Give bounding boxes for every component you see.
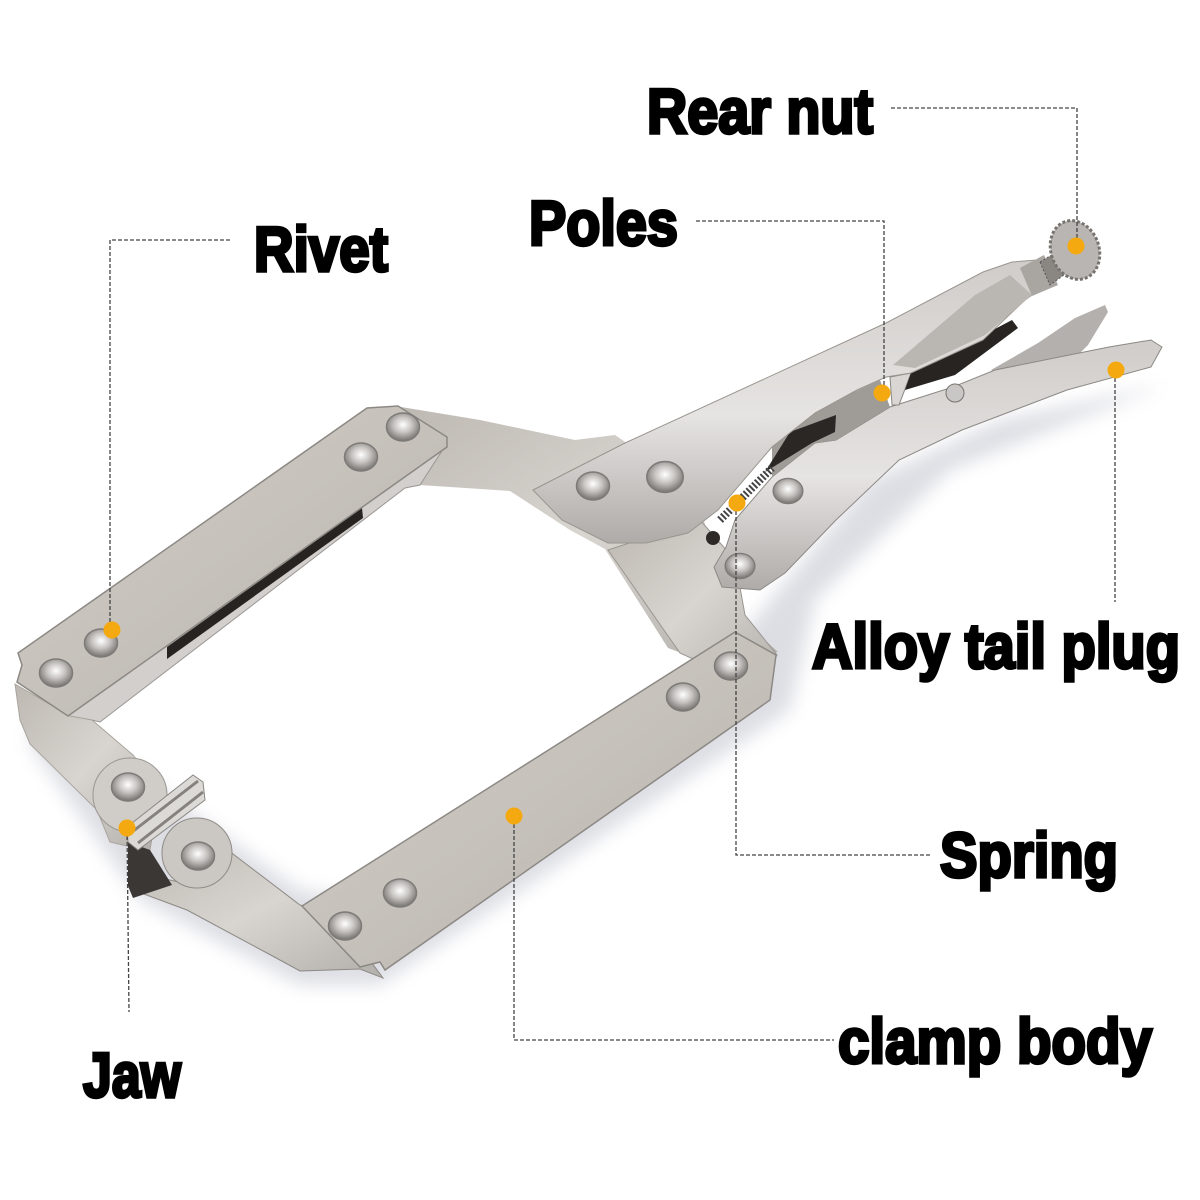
label: clamp body: clamp body bbox=[838, 1007, 1152, 1077]
black slot bbox=[167, 508, 363, 659]
rear nut bbox=[1020, 214, 1108, 296]
lower arm bbox=[130, 845, 383, 978]
dark gap and spring bbox=[706, 320, 1018, 545]
handle rivet bbox=[773, 478, 803, 504]
inner channel strip bbox=[68, 443, 447, 722]
leader: alloy tail plug bbox=[1114, 372, 1116, 602]
lower handle bbox=[714, 305, 1162, 590]
small stud bbox=[946, 384, 964, 402]
leader: rivet bbox=[110, 240, 230, 628]
upper handle with rivets bbox=[533, 260, 1047, 543]
pole stick bbox=[890, 373, 911, 405]
rivets: handle bbox=[576, 462, 683, 500]
panel: upper clamp plate bbox=[17, 406, 447, 716]
pivot rivet bbox=[725, 553, 755, 579]
leader: jaw bbox=[127, 830, 129, 1012]
rivets: upper plate bbox=[40, 413, 420, 687]
rivets: jaw bbox=[112, 773, 214, 870]
label: jaw: Jaw bbox=[83, 1041, 182, 1111]
label: rivet: Rivet bbox=[254, 215, 388, 285]
rivets: lower plate bbox=[328, 652, 748, 940]
jaw hinge bbox=[93, 758, 232, 898]
leader: poles bbox=[696, 221, 884, 392]
clamp body: rear frame and top link bbox=[68, 406, 778, 722]
label: spring: Spring bbox=[940, 821, 1118, 891]
leader: rear nut bbox=[891, 108, 1077, 240]
label: rear nut: Rear nut bbox=[647, 77, 873, 147]
soft shadow bbox=[30, 385, 1165, 985]
leader: spring bbox=[736, 505, 932, 855]
marker dots bbox=[104, 238, 1124, 836]
left arm bbox=[15, 684, 160, 850]
label: poles: Poles bbox=[529, 189, 678, 259]
panel: lower handle link bbox=[608, 520, 777, 690]
leader: clamp body bbox=[514, 818, 834, 1040]
panel: lower clamp plate bbox=[302, 632, 776, 970]
